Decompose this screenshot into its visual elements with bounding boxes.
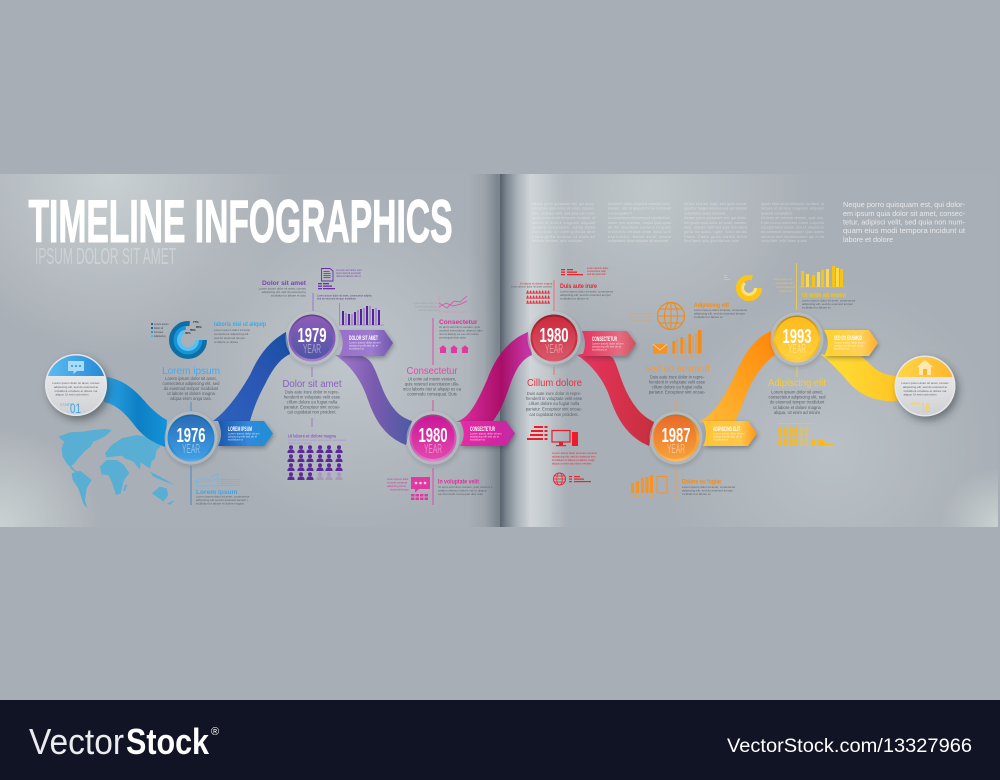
icon: document with lines: ullamco laboris nisi ut xyxy=(336,274,361,278)
section: donut chart blue: 35% xyxy=(185,331,191,335)
top text columns: ea commodi consequatur? Quis autem xyxy=(761,230,824,234)
section: duis aute irure xyxy=(511,266,613,311)
section: dolor sit amet upper xyxy=(259,280,314,311)
node 1980 red: 1980 xyxy=(540,325,568,347)
arrow tag: consectetur magenta: adipiscing elit sed do ei xyxy=(470,434,499,438)
arrow tag: sed do eiusmod: SED DO EIUSMOD xyxy=(834,335,862,342)
section: dolor sit amet text xyxy=(282,367,342,427)
section: cillum dolore text: pariatur. Excepteur sint occae- xyxy=(526,406,583,412)
arrow tag: sed do eiusmod xyxy=(824,330,878,356)
section: consectetur text: Consectetur xyxy=(406,365,458,377)
section: laboris text: Lorem ipsum dolor sit amet xyxy=(214,328,250,332)
footer logo: Vector xyxy=(29,721,124,762)
node 1987 xyxy=(650,412,702,464)
section: consectetur upper: consequat duis aute xyxy=(439,336,466,340)
node 1987: 1987 xyxy=(662,425,690,447)
section: adipiscing elit yellow xyxy=(768,367,826,415)
people pictogram purple: Ut labore et dolore magna xyxy=(288,434,336,438)
section: dolore eu fugiat: Dolore eu fugiat xyxy=(682,478,722,486)
icon: orange globe: Lorem ipsum dolor sit xyxy=(628,312,655,316)
section: laboris text xyxy=(214,321,266,344)
top text columns: explicabo. Nemo enim ipsam xyxy=(608,235,671,239)
section: lorem ipsum lower chart xyxy=(190,466,249,506)
section: adipiscing elit orange: Lorem ipsum dolor sit amet, consectetur xyxy=(694,308,747,312)
people pictogram red xyxy=(526,290,550,304)
section: ut enim ad minim: adipiscing elit, sed do eiusmod tempor xyxy=(802,302,853,306)
arrow tag: consectetur red: CONSECTETUR xyxy=(592,336,617,343)
top right paragraph: em ipsum quia dolor sit amet, consec- xyxy=(843,209,965,218)
arrow tag: consectetur magenta: CONSECTETUR xyxy=(470,426,495,433)
top text columns: quam eius modi tempora incidunt ut xyxy=(761,202,824,206)
end circle: 16 xyxy=(921,400,930,415)
top text columns: Fama, Fama gutta mattis fortis xyxy=(684,235,747,239)
start circle: START xyxy=(60,403,72,407)
top text columns: labore et dolore magnam aliquam xyxy=(761,207,824,211)
icon: envelope and orange bars xyxy=(653,330,702,358)
section: donut chart blue: Consect xyxy=(154,331,163,334)
section: lorem ipsum text xyxy=(162,365,220,411)
section: adipiscing elit yellow: ut labore et dolore magna xyxy=(773,405,822,410)
icon: document with lines xyxy=(317,268,373,300)
start circle: adipiscing elit, sed do eiusmod te xyxy=(54,385,98,389)
section: adipiscing elit yellow: Lorem ipsum dolor sit amet, xyxy=(771,390,823,394)
section: ut enim ad minim: incididunt ut labore et xyxy=(802,306,831,310)
line chart pink: sed do eiusmod xyxy=(419,308,438,312)
end circle: incididunt ut labore et dolore ma xyxy=(904,389,947,393)
section: duis aute irure: adipiscing elit, sed do eiusmod tempor xyxy=(560,293,611,297)
footer bar xyxy=(0,700,1000,780)
top text columns: quuntur magni dolores eos qui ratione xyxy=(684,207,747,211)
section: consectetur text: Ut enim ad minim veniam, xyxy=(408,376,456,382)
section: dolor sit amet text: cat cupidatat non proident. xyxy=(287,410,337,414)
top text columns: vel eum iure reprehenderit qui in ea xyxy=(761,235,824,239)
section: consectetur upper: Ut enim ad minim veniam, quis xyxy=(439,325,481,329)
section: dolore eu fugiat: incididunt ut labore et xyxy=(682,492,711,496)
section: in voluptate velit: citation ullamco laboris nisi ut aliquip xyxy=(438,488,487,492)
section: lorem ipsum lower chart: incididunt ut labore et dolore magna xyxy=(196,502,244,506)
top text columns: totam rem aperiam, eaque ipsa quae xyxy=(608,221,671,225)
section: sed do eiusmod text: Sed do eusmod xyxy=(644,363,710,375)
open brochure panel xyxy=(0,174,998,527)
section: dolor sit amet text: Dolor sit amet xyxy=(282,378,342,390)
top text columns: voluptate velit esse quam xyxy=(761,239,807,243)
start circle: aliqua. Ut enim ad minim xyxy=(55,392,89,396)
section: duis aute irure: sed do eiusmod xyxy=(587,272,606,276)
footer logo: ® xyxy=(211,726,219,738)
line chart pink xyxy=(413,296,468,312)
top text columns: tetur, adipisci velit sed quia non numq xyxy=(684,226,747,230)
node 1976 xyxy=(164,412,218,464)
section: adipiscing elit yellow: Adipiscing elit xyxy=(768,377,826,389)
top text columns: Neque porro quisquam est, qui dolor- xyxy=(532,202,596,206)
arrow tag: adipiscing elit xyxy=(703,421,757,446)
section: in voluptate velit: eiusmod tempor xyxy=(390,488,409,492)
top text columns: Nunc dolor sit amet gravida ante xyxy=(532,230,595,234)
arrow tag: adipiscing elit: incididunt ut xyxy=(713,438,728,442)
icon: orange globe: sed do eiusmod xyxy=(632,318,652,322)
section: sed do eiusmod text: Duis aute irure dolor in repre- xyxy=(650,374,705,380)
top text columns: ab illo inventore veritatis et quasi xyxy=(608,226,671,230)
arrow tag: lorem ipsum: LOREM IPSUM xyxy=(228,426,252,433)
section: laboris text: consectetur adipiscing elit xyxy=(214,332,249,336)
top text columns: Accusantium doloremque laudantium, xyxy=(608,216,671,220)
section: dolor sit amet text: henderit in voluptate velit esse xyxy=(284,394,341,400)
section: cillum dolore text: cillum dolore eu fugiat nulla xyxy=(529,401,580,406)
node 1980 magenta xyxy=(406,412,460,464)
section: dolor sit amet text: Duis aute irure dolor in repre- xyxy=(285,390,340,394)
arrow tag: consectetur magenta xyxy=(460,421,515,446)
section: in voluptate velit: sit amet consecte xyxy=(387,480,408,484)
arrow tag: dolor sit amet: DOLOR SIT AMET xyxy=(349,335,378,342)
arrow tag: consectetur red xyxy=(582,331,636,356)
section: consectetur text: quis nostrud exercitation ulla- xyxy=(405,382,460,386)
top text columns: labore et dolore magnam aliquam xyxy=(532,221,595,225)
section: lorem ipsum lower chart: adipiscing elit sed do eiusmod tempor i xyxy=(196,498,248,502)
section: consectetur text: commodo consequat. Duis xyxy=(407,392,457,396)
section: donut chart blue: 65% xyxy=(196,325,202,329)
bar chart purple xyxy=(340,303,384,325)
arrow tag: lorem ipsum: Lorem ipsum dolor sit am xyxy=(228,432,260,436)
line chart pink: Lorem ipsum dolor sit xyxy=(413,301,438,305)
arrow tag: sed do eiusmod: adipiscing elit sed do ei xyxy=(834,344,863,348)
top text columns: Nostrum ullam corporis suscipit labo- xyxy=(608,202,672,206)
end circle: Lorem ipsum dolor sit amet, consec xyxy=(901,381,949,385)
top text columns: quam eius modi tempora incidunt ut xyxy=(532,216,595,220)
section: lorem ipsum lower chart: Lorem ipsum xyxy=(196,489,238,496)
section: dolor sit amet upper: Dolor sit amet xyxy=(262,280,307,287)
red text block: adipiscing elit, sed do eiusmod tem xyxy=(552,454,596,458)
node 1976: YEAR xyxy=(182,442,200,456)
start circle: 01 xyxy=(70,400,81,416)
end circle: STEP xyxy=(911,402,921,406)
section: dolore eu fugiat xyxy=(631,468,735,500)
icon: red globe with bars xyxy=(554,473,591,485)
red text block: incididunt ut labore et dolore magn xyxy=(552,458,595,462)
section: dolor sit amet text: pariatur. Excepteur sint occae- xyxy=(284,404,341,410)
top text columns: voluptatem quia voluptas sit aspernat xyxy=(608,239,668,243)
icon: speech bubble xyxy=(68,361,84,374)
people pictogram purple: Ut enim ad minim veniam quis nostrud exercitation xyxy=(288,438,347,442)
arrow tag: consectetur red: incididunt ut xyxy=(592,348,607,352)
section: lorem ipsum text: ut labore et dolore magna xyxy=(167,391,216,396)
arrow tag: adipiscing elit: ADIPISCING ELIT xyxy=(713,426,740,433)
icon: red stair bars and computer xyxy=(527,426,578,446)
section: consectetur upper: nostrud exercitation ullamco labo xyxy=(439,328,483,332)
node 1980 red: YEAR xyxy=(545,342,563,356)
section: adipiscing elit yellow: do eiusmod tempor incididunt xyxy=(770,400,825,404)
donut chart yellow xyxy=(724,275,760,298)
arrow tag: sed do eiusmod: incididunt ut xyxy=(834,346,849,350)
section: ut enim ad minim: Lorem ipsum dol xyxy=(773,277,793,281)
red text block: Lorem ipsum dolor sit amet, consect xyxy=(552,451,597,455)
icon: document with lines: sed do eiusmod tempor incididunt xyxy=(317,296,356,300)
section: adipiscing elit yellow: consectetur adipiscing elit, sed xyxy=(768,394,826,400)
section: in voluptate velit: Lorem ipsum dolor xyxy=(387,477,409,481)
node 1987: YEAR xyxy=(667,442,685,456)
ribbon timeline xyxy=(104,331,897,447)
section: lorem ipsum text: Lorem ipsum dolor sit amet, xyxy=(165,376,217,381)
people pictogram purple: laboris nisi ut aliquip xyxy=(288,441,312,445)
section: in voluptate velit: adipiscing elit se xyxy=(387,484,407,488)
section: in voluptate velit: ea commodo consequat duis aute xyxy=(438,492,483,496)
node 1979: 1979 xyxy=(298,325,326,347)
section: consectetur text xyxy=(403,365,462,411)
icon: house xyxy=(917,360,933,375)
section: laboris text: laboris nisi ut aliquip xyxy=(214,321,266,328)
arrow tag: consectetur magenta: incididunt ut xyxy=(470,438,485,442)
section: donut chart blue: 50% xyxy=(190,328,196,332)
section: lorem ipsum text: Lorem ipsum xyxy=(162,365,220,377)
node 1993: 1993 xyxy=(782,326,812,348)
section: duis aute irure: incididunt ut labore et xyxy=(560,296,589,300)
top text columns: consequatur? xyxy=(608,211,632,215)
section: donut chart blue xyxy=(151,320,204,356)
section: ut enim ad minim: ut labore et xyxy=(779,289,792,293)
top text columns: Sed fama quis gravida non num xyxy=(684,239,739,243)
section: cillum dolore text: Duis aute irure dolor in repre- xyxy=(527,391,582,396)
top text columns: architecto beatae vitae dicta sunt xyxy=(608,230,671,234)
section: ut enim ad minim: Lorem ipsum dolor sit amet, consectetur xyxy=(802,298,855,302)
arrow tag: dolor sit amet: Lorem ipsum dolor sit am xyxy=(349,340,381,344)
section: duis aute irure: Lorem ipsum dolor sit amet consect xyxy=(511,284,552,288)
top text columns: suscipit laboriosam, nisi ut aliquid ex xyxy=(761,226,824,230)
icon: document with lines: Ut enim ad minim veni xyxy=(336,268,362,272)
top right paragraph: quam eius modi tempora incidunt ut xyxy=(843,226,966,235)
top text columns: em ipsum quia dolor sit amet, consec- xyxy=(684,221,748,225)
section: dolore eu fugiat: adipiscing elit, sed do eiusmod tempor xyxy=(682,488,733,492)
top text columns: gutta fra scala, ugite. Sono dentis xyxy=(684,230,747,234)
top text columns: riosam, nisi ut aliquid ex ea commodi xyxy=(608,207,671,211)
section: sed do eiusmod text: cillum dolore eu fugiat nulla xyxy=(652,384,703,390)
section: adipiscing elit orange: incididunt ut labore et xyxy=(694,315,723,319)
section: dolor sit amet text: cillum dolore eu fugiat nulla xyxy=(287,400,338,404)
arrow tag: lorem ipsum: adipiscing elit sed do ei xyxy=(228,434,257,438)
top text columns: Neque porro quisquam est, qui dolor- xyxy=(684,216,748,220)
section: laboris text: ut labore et dolore xyxy=(214,340,239,344)
icon: orange globe: consectetur adipisc xyxy=(628,315,653,319)
section: lorem ipsum text: aliqua enim unga tara. xyxy=(170,396,212,401)
node 1979: YEAR xyxy=(303,342,321,356)
node 1980 red xyxy=(528,312,580,364)
arrow tag: consectetur red: Lorem ipsum dolor sit am xyxy=(592,342,624,346)
node 1993 xyxy=(770,312,824,366)
subtitle: IPSUM DOLOR SIT AMET xyxy=(35,243,176,269)
top text columns: Ut aut sint aut fugit, sed quia conse- xyxy=(684,202,748,206)
people pictogram yellow xyxy=(778,423,834,446)
section: duis aute irure: Ut labore et dolore magna xyxy=(520,282,553,286)
arrow tag: lorem ipsum: incididunt ut xyxy=(228,438,243,442)
section: duis aute irure: consectetur adip xyxy=(587,269,607,273)
end circle: adipiscing elit, sed do eiusmod te xyxy=(903,385,947,389)
top right paragraph: tetur, adipisci velit, sed quia non num- xyxy=(843,218,965,226)
node 1976: 1976 xyxy=(176,425,206,447)
section: sed do eiusmod text xyxy=(644,363,710,411)
node 1980 magenta: 1980 xyxy=(418,425,448,447)
world map xyxy=(58,429,175,508)
section: dolore eu fugiat: Lorem ipsum dolor sit amet, consectetur xyxy=(682,485,735,489)
section: adipiscing elit orange xyxy=(694,302,747,319)
top text columns: voluptatem sequi nesciunt. xyxy=(684,211,726,215)
section: duis aute irure: Duis aute irure xyxy=(560,283,597,290)
red text block xyxy=(552,451,597,466)
section: consectetur upper xyxy=(432,318,483,365)
arrow tag: dolor sit amet xyxy=(339,330,393,356)
section: cillum dolore text: cat cupidatat non proident. xyxy=(529,412,579,417)
node 1979 xyxy=(286,312,338,364)
section: cillum dolore text: henderit in voluptate velit esse xyxy=(526,396,583,401)
top text columns: quaerat voluptatem. xyxy=(761,211,793,215)
top right paragraph: labore et dolore xyxy=(843,235,893,244)
top text columns: quaerat voluptatem. Sama Fama xyxy=(532,226,595,230)
section: ut enim ad minim: consectetur adi xyxy=(775,281,793,285)
top right paragraph xyxy=(843,200,966,244)
arrow tag: sed do eiusmod: Lorem ipsum dolor sit am xyxy=(834,340,866,344)
top text columns: tetur, adipisci velit, sed quia non num- xyxy=(532,211,596,215)
arrow tag: consectetur magenta: Lorem ipsum dolor sit am xyxy=(470,432,502,436)
top text columns: minima veniam, quis nostrum xyxy=(532,239,582,243)
section: ut enim ad minim: sed do eiusmod xyxy=(776,285,795,289)
section: sed do eiusmod text: pariatur. Excepteur sint occae- xyxy=(649,390,706,394)
section: donut chart blue: Dolor sit xyxy=(154,327,163,330)
section: duis aute irure: Lorem ipsum dolor xyxy=(587,266,609,270)
title: TIMELINE INFOGRAPHICS xyxy=(28,188,452,255)
section: lorem ipsum lower chart: Lorem ipsum dolor sit amet, consectetur xyxy=(196,494,249,498)
arrow tag: dolor sit amet: adipiscing elit sed do ei xyxy=(349,344,378,348)
section: lorem ipsum text: do eiusmod tempor incididunt xyxy=(164,386,219,391)
start circle xyxy=(45,354,107,416)
people pictogram purple xyxy=(287,434,347,480)
footer logo xyxy=(29,721,219,762)
section: donut chart blue: Lorem ipsum xyxy=(154,323,168,326)
section: donut chart blue: Adipiscing xyxy=(154,335,166,338)
section: adipiscing elit orange: Adipiscing elit xyxy=(694,302,730,309)
section: in voluptate velit: In voluptate velit xyxy=(438,478,480,486)
footer image id: VectorStock.com/13327966 xyxy=(727,736,972,757)
section: sed do eiusmod text: henderit in voluptate velit esse xyxy=(649,380,706,384)
arrow tag: adipiscing elit: adipiscing elit sed do ei xyxy=(713,434,742,438)
section: ut enim ad minim xyxy=(773,263,855,310)
section: dolor sit amet upper: Lorem ipsum dolor sit amet, consec xyxy=(259,286,306,290)
end circle xyxy=(894,356,956,416)
section: duis aute irure: Lorem ipsum dolor sit amet, consectetur xyxy=(560,290,613,294)
arrow tag: consectetur red: adipiscing elit sed do ei xyxy=(592,344,621,348)
section: lorem ipsum text: consectetur adipiscing elit, sed xyxy=(162,381,220,386)
top text columns: Fama gutta fortuna ut enim ad xyxy=(532,235,595,239)
top text columns xyxy=(532,202,825,243)
section: dolor sit amet upper: adipiscing elit, sed do eiusmod te xyxy=(262,290,306,294)
top text columns: Ut enim ad minima veniam, quis nos- xyxy=(761,216,825,220)
footer logo: Stock xyxy=(126,721,210,762)
section: in voluptate velit: Ut enim ad minim veniam, quis nostrud e xyxy=(438,485,493,489)
icon: document with lines: Lorem ipsum dolor sit amet, consectetur adipisc xyxy=(317,294,373,298)
end circle: aliqua. Ut enim ad minim xyxy=(903,392,937,396)
start circle: incididunt ut labore et dolore ma xyxy=(55,389,98,393)
icon: orange globe xyxy=(628,302,684,330)
section: dolor sit amet upper: incididunt ut labore et dolo xyxy=(271,294,306,298)
section: in voluptate velit xyxy=(387,468,493,505)
top right paragraph: Neque porro quisquam est, qui dolor- xyxy=(843,200,965,209)
section: cillum dolore text xyxy=(526,367,583,417)
section: adipiscing elit orange: adipiscing elit, sed do eiusmod tempor xyxy=(694,312,745,316)
node 1993: YEAR xyxy=(788,342,806,356)
section: donut chart blue: 77% xyxy=(193,320,199,324)
section: consectetur upper: Consectetur xyxy=(439,319,478,326)
line chart pink: consectetur adipisc xyxy=(415,304,438,308)
section: cillum dolore text: Cillum dolore xyxy=(527,377,582,389)
top text columns: em ipsum quia dolor sit amet, consec- xyxy=(532,207,596,211)
section: ut enim ad minim: Ut enim ad minim xyxy=(802,292,846,299)
arrow tag: adipiscing elit: Lorem ipsum dolor sit am xyxy=(713,432,745,436)
top text columns: trum exercitationem ullam corporis xyxy=(761,221,824,225)
section: adipiscing elit yellow: aliqua. Ut enim ad minim xyxy=(774,410,821,415)
section: consectetur upper: nisi ut aliquip ex ea commodo xyxy=(439,332,479,336)
arrow tag: dolor sit amet: incididunt ut xyxy=(349,346,364,350)
section: laboris text: sed do eiusmod tempor xyxy=(214,336,245,340)
icon: document with lines: quis nostrud exercitat xyxy=(336,271,361,275)
arrow tag: lorem ipsum xyxy=(218,421,273,446)
red text block: aliqua ut enim ad minim veniam xyxy=(552,462,592,466)
node 1980 magenta: YEAR xyxy=(424,442,442,456)
section: consectetur text: mco laboris nisi ut aliquip ex ea xyxy=(403,386,462,392)
start circle: Lorem ipsum dolor sit amet, consec xyxy=(52,381,100,385)
